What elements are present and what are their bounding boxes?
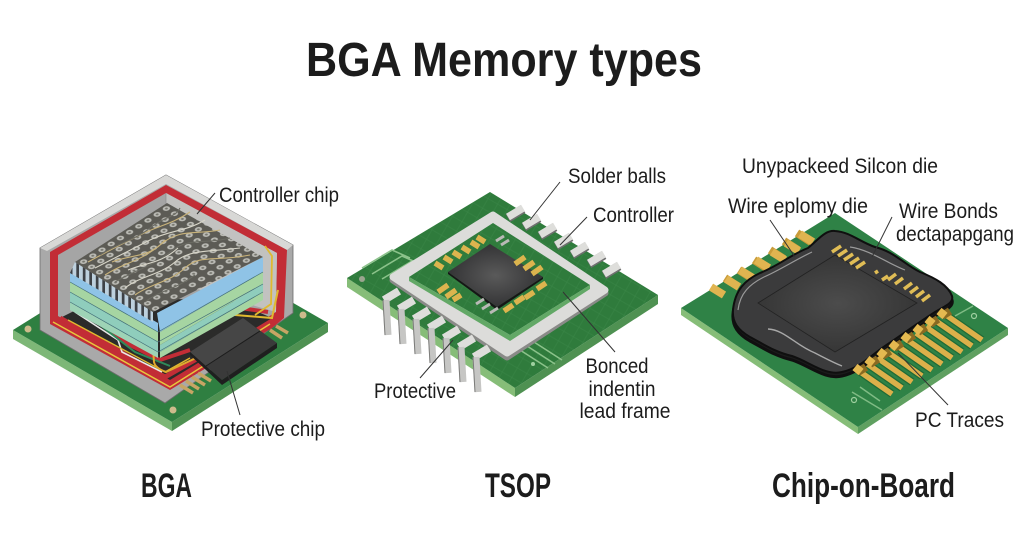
label: Wire Bonds dectapapgang <box>872 200 1014 257</box>
label: Wire Bonds dectapapgang: Wire Bonds <box>899 200 998 223</box>
label: Controller chip: Controller chip <box>219 184 339 207</box>
small components <box>476 236 509 313</box>
label: Controller: Controller <box>593 204 674 227</box>
wire bond pads <box>832 246 930 301</box>
panel: Chip-on-Board illustration <box>681 155 1014 434</box>
floor traces <box>60 246 278 380</box>
silicon die <box>758 255 917 352</box>
label: Solder balls: Solder balls <box>568 165 666 188</box>
protective chip <box>190 318 277 385</box>
label: Wire eplomy die <box>728 195 868 257</box>
heading: TSOP: TSOP <box>485 467 551 505</box>
cutaway housing <box>40 175 293 403</box>
title: BGA Memory types <box>306 34 702 87</box>
memory die stack <box>70 257 263 358</box>
raised gold pad blocks <box>855 311 950 372</box>
COB circuit board <box>681 213 1008 434</box>
TSOP circuit board <box>347 192 658 397</box>
lead frame <box>393 215 605 357</box>
label: Bonced indentin lead frame <box>563 292 670 423</box>
label: Controller <box>560 204 674 245</box>
label: Protective <box>374 340 456 403</box>
heading: Chip-on-Board: Chip-on-Board <box>772 467 955 505</box>
label: Protective chip: Protective chip <box>201 418 325 441</box>
silicon die <box>448 244 543 310</box>
label: Unypackeed Silcon die: Unypackeed Silcon die <box>742 155 938 178</box>
gold pads <box>435 237 546 311</box>
label: Controller chip <box>197 184 339 214</box>
panel: TSOP illustration <box>347 165 674 423</box>
rear leads <box>508 208 619 275</box>
label: PC Traces: PC Traces <box>915 409 1004 432</box>
board pins <box>180 326 288 393</box>
label: Solder balls <box>530 165 666 220</box>
front leads <box>383 291 489 392</box>
label: Protective chip <box>201 371 325 441</box>
label: Wire eplomy die: Wire eplomy die <box>728 195 868 218</box>
heading: BGA: BGA <box>141 467 192 505</box>
label: PC Traces <box>898 353 1004 432</box>
label: Bonced indentin lead frame: indentin <box>588 378 656 401</box>
front gold traces <box>856 315 982 394</box>
solder ball grid with wires <box>75 203 263 312</box>
encapsulant blob <box>733 231 952 377</box>
rear gold pads <box>711 233 813 295</box>
label: Bonced indentin lead frame: Bonced <box>586 355 648 378</box>
label: Bonced indentin lead frame: lead frame <box>580 400 670 423</box>
panel: BGA illustration <box>13 175 339 441</box>
BGA circuit board <box>13 232 328 431</box>
label: Protective: Protective <box>374 380 456 403</box>
